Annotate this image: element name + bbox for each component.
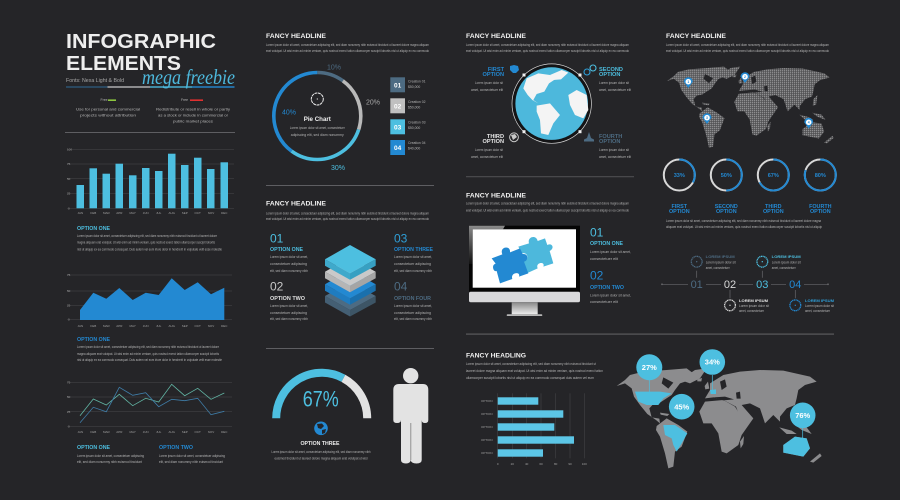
timeline: 04 [789,279,801,291]
heading: pie chart panel: erat volutpat. Ut wisi enim ad minim veniam, quis nostrud exerci tation ullamcorper suscipit lobortis nisl ut aliquip ex ea commodo [266,49,429,53]
text block: option one under line chart: Lorem ipsum dolor sit amet, consectetuer adipiscing [77,454,144,458]
second option text and icon: SECOND [599,67,623,73]
area chart: 75 [67,273,71,277]
area chart: NOV [208,324,214,328]
monitor option two text: Lorem ipsum dolor sit amet, [590,294,631,298]
bar chart: FEB [90,211,96,215]
heading: monitor panel: Lorem ipsum dolor sit amet, consectetuer adipiscing elit, sed diam nonummy nibh euismod tincidunt ut laoreet dolore magna aliquam [466,202,629,206]
third option text and icon: THIRD [487,134,504,140]
timeline: amet, consectetuer [772,266,796,270]
option four text: consectetuer adipiscing [394,311,431,315]
monitor with puzzle pieces [469,226,580,316]
isometric layer stack [325,245,376,316]
area chart: JUL [156,324,162,328]
heading: horizontal bar panel [466,352,603,380]
text block: option one under line chart: OPTION ONE [77,445,110,451]
line chart: JUL [156,430,162,434]
option three text [394,232,433,273]
text block: option one under bar chart [77,226,222,252]
bar chart: 75 [67,162,71,166]
area chart: 50 [67,289,71,293]
monitor option one text: 01 [590,226,604,240]
second option text and icon: amet, consectetuer elit [599,88,631,92]
first option text and icon: amet, consectetuer elit [471,88,503,92]
heading: layer stack panel: FANCY HEADLINE [266,201,327,208]
timeline: 02 [724,279,736,291]
heading: monitor panel [466,193,629,212]
heading: pie chart panel: FANCY HEADLINE [266,33,327,40]
percentage rings: FIRST [672,204,688,210]
text block: option one under area chart [77,337,222,362]
option one text [270,232,308,273]
text block: option one under bar chart: nisl ut aliquip ex ea commodo consequat. Duis autem vel eum iriure dolor in hendrerit in vulputate velit esse molestie [77,248,222,252]
pie chart ring: Lorem ipsum dolor sit amet, consectetuer [290,126,346,130]
pie chart legend: Creation 02 [408,100,426,104]
option three caption: OPTION THREE [300,441,340,447]
monitor option two text [590,268,631,304]
option three caption [272,441,371,461]
percentage rings: FOURTH [809,204,832,210]
percentage rings: THIRD [765,204,782,210]
option one text: elit, sed diam nonummy nibh [270,269,308,273]
pie chart ring: 20% [366,100,380,106]
horizontal bar chart: OPTION [481,399,493,403]
timeline: amet, consectetuer [805,309,831,313]
line chart: OCT [195,430,201,434]
pie chart ring [274,64,380,172]
option one text: OPTION ONE [270,247,303,253]
pie chart legend [390,77,426,155]
title block: ELEMENTS [66,52,181,75]
timeline: amet, consectetuer [739,309,765,313]
bar chart: DEC [221,211,228,215]
pie chart legend: 04 [394,145,402,152]
second option text and icon [584,65,631,92]
timeline: LOREM IPSUM [772,254,801,259]
heading: layer stack panel: Lorem ipsum dolor sit amet, consectetuer adipiscing elit, sed diam nonummy nibh euismod tincidunt ut laoreet dolore magna aliquam [266,212,429,216]
fourth option text and icon: FOURTH [599,134,622,140]
option three text: elit, sed diam nonummy nibh [394,269,432,273]
heading: monitor panel: erat volutpat. Ut wisi enim ad minim veniam, quis nostrud exerci tation ullamcorper suscipit lobortis nisl ut aliquip ex ea commodo [466,208,629,212]
pie chart ring: Pie Chart [304,116,331,123]
percentage rings: OPTION [810,209,831,215]
option three text: Lorem ipsum dolor sit amet, [394,255,432,259]
line chart: APR [116,430,123,434]
globe illustration [512,64,591,143]
timeline: LOREM IPSUM [805,298,835,303]
heading: dotted map panel [666,33,829,53]
first option text and icon: OPTION [483,72,504,78]
area chart: 0 [68,318,70,322]
fourth option text and icon: OPTION [599,139,620,145]
percentage rings: OPTION [669,209,690,215]
percentage rings: 33% [674,173,685,179]
area chart [67,273,232,328]
horizontal bar chart: OPTION [481,438,493,442]
option four text: Lorem ipsum dolor sit amet, [394,304,432,308]
bar chart: MAY [130,211,136,215]
line chart: NOV [208,430,214,434]
heading: globe panel: Lorem ipsum dolor sit amet, consectetuer adipiscing elit, sed diam nonummy nibh euismod tincidunt ut laoreet dolore magna aliquam [466,43,629,47]
horizontal bar chart: OPTION [481,425,493,429]
gauge 67 percent [276,373,367,418]
free and paid licence notes: public market places [173,120,213,124]
monitor option one text: Lorem ipsum dolor sit amet, [590,250,631,254]
bar chart: OCT [195,211,201,215]
title block: mega freebie [142,65,235,89]
free and paid licence notes [76,98,230,124]
icon: person figure [393,368,428,464]
text block: option two under line chart [159,445,225,464]
option three text: OPTION THREE [394,247,433,253]
monitor option two text: consectetuer elit [590,300,618,304]
text block: option one under bar chart: magna aliquam erat volutpat. Ut wisi enim ad minim veniam, quis nostrud exerci tation ullamcorper suscipit lobortis [77,240,215,244]
option three text: 03 [394,232,408,246]
third option text and icon: Lorem ipsum dolor sit [475,148,503,152]
pie chart ring: 40% [282,110,296,116]
option four text [394,280,432,321]
percentage rings: 67% [768,173,779,179]
bar chart: 50 [67,177,71,181]
line chart: MAY [130,430,136,434]
world map with percentage bubbles: 45% [674,402,690,411]
text block: option two under line chart: elit, sed diam nonummy nibh euismod tincidunt [159,460,223,464]
option three text: consectetuer adipiscing [394,262,431,266]
line chart: 0 [68,424,70,428]
pie chart ring: adipiscing elit, sed diam nonummy [291,133,344,137]
bar chart: SEP [182,211,188,215]
text block: option one under area chart: OPTION ONE [77,337,110,343]
heading: dotted map panel: Lorem ipsum dolor sit amet, consectetuer adipiscing elit, sed diam nonummy nibh euismod tincidunt ut laoreet dolore magna aliquam [666,43,829,47]
timeline: Lorem ipsum dolor sit [805,304,834,308]
pie chart legend: 03 [394,124,402,131]
line chart: DEC [221,430,228,434]
horizontal bar chart: 100 [582,462,587,466]
pie chart legend: $40,000 [408,146,420,150]
world map with percentage bubbles: 34% [705,358,720,367]
title block: Fonts: Nexa Light & Bold [66,78,124,84]
horizontal bar chart: 0 [497,462,499,466]
dotted world map with pins: 4 [808,121,810,125]
bar chart [67,148,234,215]
heading: globe panel [466,33,629,53]
heading: monitor panel: FANCY HEADLINE [466,193,527,200]
option two text: elit, sed diam nonummy nibh [270,317,308,321]
timeline: Lorem ipsum dolor sit [772,260,801,264]
text block: option one under bar chart: OPTION ONE [77,226,110,232]
rings caption: Lorem ipsum dolor sit amet, consectetuer adipiscing elit, sed diam nonummy nibh euismod tincidunt ut laoreet dolore magna [666,219,821,223]
pie chart legend: $50,000 [408,126,420,130]
third option text and icon: OPTION [483,139,504,145]
horizontal bar chart: 60 [539,462,543,466]
text block: option one under area chart: Lorem ipsum dolor sit amet, consectetuer adipiscing elit, sed diam nonummy nibh euismod tincidunt ut laoreet dolore [77,345,219,349]
heading: horizontal bar panel: ullamcorper suscipit lobortis nisl ut aliquip ex ea commodo consequat duis autem vel eum [466,376,594,380]
text block: option two under line chart: OPTION TWO [159,445,194,451]
bar chart: JAN [77,211,83,215]
gauge 67 percent: 67% [303,387,339,412]
third option text and icon: amet, consectetuer elit [471,155,503,159]
area chart: DEC [221,324,228,328]
pie chart legend: 01 [394,82,402,89]
world map with percentage bubbles: 27% [642,363,657,372]
area chart: FEB [90,324,96,328]
timeline: Lorem ipsum dolor sit [739,304,769,308]
option two text: 02 [270,280,284,294]
heading: dotted map panel: FANCY HEADLINE [666,33,727,40]
monitor option one text [590,226,631,261]
horizontal bar chart: OPTION [481,412,493,416]
option three caption: Lorem ipsum dolor sit amet, consectetuer adipiscing elit, sed diam nonummy nibh [272,450,371,454]
bar chart: NOV [208,211,214,215]
percentage rings: OPTION [763,209,784,215]
timeline: Lorem ipsum dolor sit [706,260,736,264]
free and paid licence notes: Use for personal and commercial [76,108,140,112]
line chart: FEB [90,430,96,434]
second option text and icon: Lorem ipsum dolor sit [599,81,629,85]
timeline: amet, consectetuer [706,266,730,270]
line chart: 50 [67,395,71,399]
timeline [661,254,835,313]
area chart: JUN [143,324,149,328]
heading: horizontal bar panel: laoreet dolore magna aliquam erat volutpat. Ut wisi enim ad minim veniam, quis nostrud exerci tation [466,369,603,373]
option two text: consectetuer adipiscing [270,311,307,315]
line chart: 25 [67,410,71,414]
heading: horizontal bar panel: Lorem ipsum dolor sit amet, consectetuer adipiscing elit, sed diam nonummy nibh euismod tincidunt ut [466,362,596,366]
third option text and icon [471,133,518,159]
percentage rings: 50% [721,173,732,179]
pie chart ring: 30% [331,165,345,172]
area chart: SEP [182,324,188,328]
option four text: 04 [394,280,408,294]
pie chart legend: Creation 04 [408,141,426,145]
icon: small globe [314,422,328,435]
option four text: elit, sed diam nonummy nibh [394,317,432,321]
timeline: 01 [691,279,703,291]
timeline: 03 [756,279,768,291]
pie chart legend: $50,000 [408,85,420,89]
percentage rings: OPTION [716,209,737,215]
option three caption: euismod tincidunt ut laoreet dolore magna aliquam erat volutpat ut wisi [274,457,368,461]
heading: pie chart panel: Lorem ipsum dolor sit amet, consectetuer adipiscing elit, sed diam nonummy nibh euismod tincidunt ut laoreet dolore magna aliquam [266,43,429,47]
dotted world map with pins: 1 [687,80,689,84]
bar chart: JUL [156,211,162,215]
fourth option text and icon: Lorem ipsum dolor sit [599,148,629,152]
bar chart: APR [116,211,123,215]
first option text and icon [471,65,519,92]
text block: option one under line chart [77,445,144,464]
percentage rings: SECOND [715,204,738,210]
area chart: APR [116,324,123,328]
fourth option text and icon [584,132,631,159]
bar chart: 25 [67,192,71,196]
bar chart: JUN [143,211,149,215]
line chart: AUG [168,430,176,434]
heading: layer stack panel [266,201,429,221]
bar chart: 100 [67,148,72,152]
timeline: LOREM IPSUM [739,298,769,303]
heading: pie chart panel [266,33,429,53]
line chart: SEP [182,430,188,434]
option two text: OPTION TWO [270,296,306,302]
option one text: Lorem ipsum dolor sit amet, [270,255,308,259]
title block [66,30,235,89]
free and paid licence notes: Free [181,98,188,102]
title block: INFOGRAPHIC [66,30,216,53]
text block: option one under bar chart: Lorem ipsum dolor sit amet, consectetuer adipiscing elit, sed diam nonummy nibh euismod tincidunt ut laoreet dolore [77,234,217,238]
horizontal bar chart: 20 [511,462,514,466]
area chart: 25 [67,304,71,308]
heading: globe panel: FANCY HEADLINE [466,33,527,40]
bar chart: 0 [68,206,70,210]
percentage rings: 80% [815,173,826,179]
rings caption: aliquam erat volutpat. Ut wisi enim ad minim veniam, quis nostrud exerci tation ullamcorper suscipit lobortis nisl ut aliquip [666,225,822,229]
text block: option one under area chart: magna aliquam erat volutpat. Ut wisi enim ad minim veniam, quis nostrud exerci tation ullamcorper suscipit lobortis [77,352,219,356]
pie chart legend: Creation 01 [408,80,426,84]
heading: dotted map panel: erat volutpat. Ut wisi enim ad minim veniam, quis nostrud exerci tation ullamcorper suscipit lobortis nisl ut aliquip ex ea commodo [666,49,829,53]
heading: horizontal bar panel: FANCY HEADLING [466,352,526,360]
dotted world map with pins: 2 [744,75,746,79]
bar chart: MAR [103,211,110,215]
horizontal bar chart: 80 [554,462,558,466]
pie chart legend: Creation 03 [408,120,426,124]
percentage rings [664,160,836,215]
bar chart: AUG [168,211,176,215]
text block: option one under area chart: nisl ut aliquip ex ea commodo consequat. Duis autem vel eum iriure dolor in hendrerit in vulputate velit esse molestie [77,358,222,362]
line chart [67,380,232,434]
world map with percentage bubbles [617,349,822,468]
dotted world map with pins: 3 [706,116,708,120]
world map with percentage bubbles: 76% [795,411,811,420]
monitor option two text: OPTION TWO [590,285,625,291]
option one text: 01 [270,232,284,246]
timeline: LOREM IPSUM [706,254,735,259]
line chart: MAR [103,430,110,434]
horizontal bar chart: 40 [525,462,529,466]
option one text: consectetuer adipiscing [270,262,307,266]
area chart: MAR [103,324,110,328]
heading: layer stack panel: erat volutpat. Ut wisi enim ad minim veniam, quis nostrud exerci tation ullamcorper suscipit lobortis nisl ut aliquip ex ea commodo [266,217,429,221]
area chart: MAY [130,324,136,328]
area chart: AUG [168,324,176,328]
area chart: JAN [77,324,83,328]
line chart: JUN [143,430,149,434]
line chart: JAN [77,430,83,434]
option four text: OPTION FOUR [394,296,431,302]
fourth option text and icon: amet, consectetuer elit [599,155,631,159]
text block: option one under line chart: elit, sed diam nonummy nibh euismod tincidunt [77,460,142,464]
free and paid licence notes: Free [100,98,108,102]
horizontal bar chart: OPTION [481,451,493,455]
free and paid licence notes: as a stock or include in commercial or [158,114,229,118]
pie chart ring: 10% [327,64,341,72]
option two text: Lorem ipsum dolor sit amet, [270,304,308,308]
horizontal bar chart [481,393,587,466]
pie chart legend: 02 [394,103,402,110]
area chart: OCT [195,324,201,328]
horizontal bar chart: 90 [568,462,572,466]
first option text and icon: FIRST [488,67,505,73]
pie chart legend: $50,000 [408,106,420,110]
line chart: 75 [67,380,71,384]
dotted world map with pins [667,67,834,148]
monitor option one text: consectetuer elit [590,257,618,261]
rings caption [666,219,822,229]
free and paid licence notes: projects without attribution [80,114,136,118]
free and paid licence notes: Redistribute or resell in whole or partly [156,108,230,112]
second option text and icon: OPTION [599,72,620,78]
heading: globe panel: erat volutpat. Ut wisi enim ad minim veniam, quis nostrud exerci tation ullamcorper suscipit lobortis nisl ut aliquip ex ea commodo [466,49,629,53]
text block: option two under line chart: Lorem ipsum dolor sit amet, consectetuer adipiscing [159,454,225,458]
first option text and icon: Lorem ipsum dolor sit [475,81,503,85]
monitor option two text: 02 [590,268,604,282]
option two text [270,280,308,321]
monitor option one text: OPTION ONE [590,241,623,247]
